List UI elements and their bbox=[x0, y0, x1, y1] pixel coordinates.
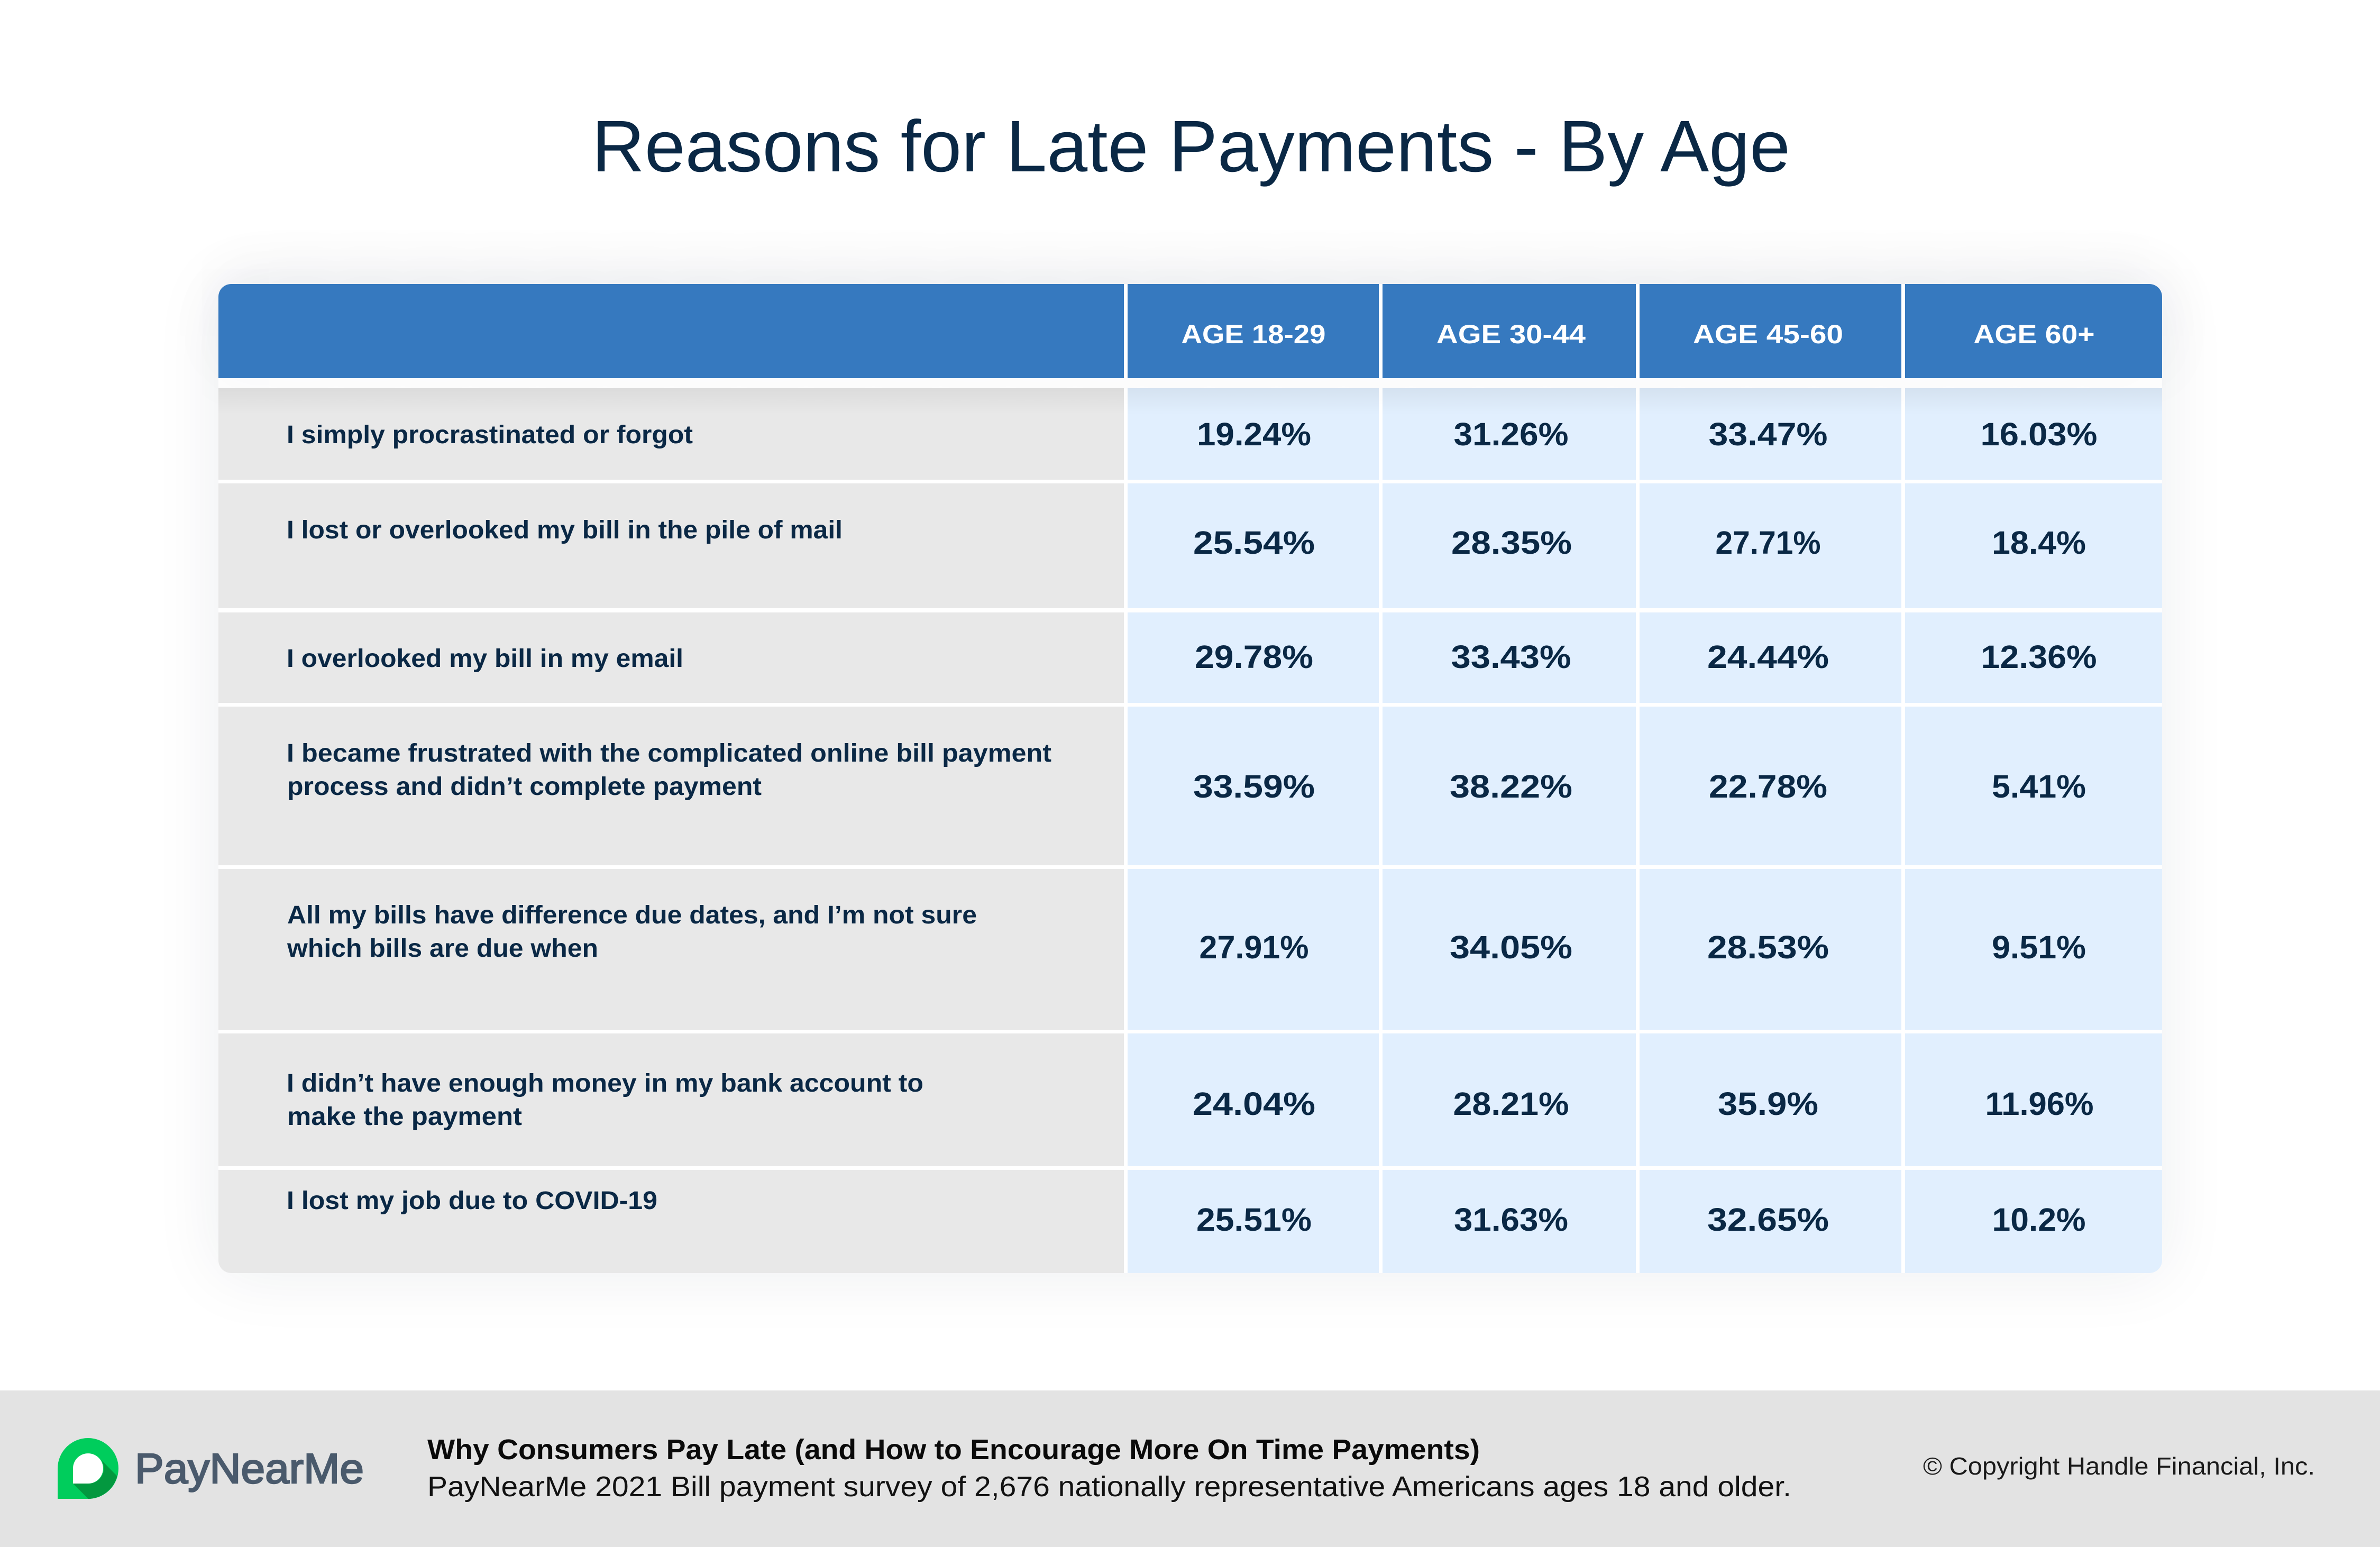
footer band bbox=[0, 1390, 2380, 1547]
source heading: Why Consumers Pay Late (and How to Encourage More On Time Payments) bbox=[427, 1434, 1480, 1466]
row label: I lost my job due to COVID-19 bbox=[287, 1187, 657, 1215]
table panel bbox=[218, 284, 2162, 1273]
row label: I lost or overlooked my bill in the pile of mail bbox=[287, 516, 843, 544]
value age 45-60: 22.78% bbox=[1709, 768, 1827, 804]
value age 45-60: 33.47% bbox=[1708, 416, 1828, 452]
row label: process and didn’t complete payment bbox=[287, 773, 762, 801]
column heading: age 18-29: AGE 18-29 bbox=[1182, 319, 1325, 349]
value age 60+: 16.03% bbox=[1980, 416, 2098, 452]
row label: make the payment bbox=[287, 1103, 522, 1131]
row: frustrated with online payment bbox=[218, 707, 2162, 865]
row label bbox=[287, 901, 977, 963]
value age 30-44: 34.05% bbox=[1450, 929, 1572, 965]
value age 18-29: 25.51% bbox=[1196, 1202, 1312, 1238]
value age 60+: 5.41% bbox=[1992, 768, 2086, 804]
value age 60+: 9.51% bbox=[1992, 929, 2086, 965]
value age 60+: 12.36% bbox=[1981, 639, 2097, 675]
value age 30-44: 33.43% bbox=[1451, 639, 1571, 675]
row: not enough money bbox=[218, 1033, 2162, 1166]
row label: I became frustrated with the complicated online bill payment bbox=[287, 739, 1051, 767]
row label: I simply procrastinated or forgot bbox=[287, 421, 693, 449]
value age 18-29: 19.24% bbox=[1197, 416, 1311, 452]
row: overlooked bill in email bbox=[218, 612, 2162, 703]
value age 18-29: 29.78% bbox=[1195, 639, 1313, 675]
value age 45-60: 27.71% bbox=[1716, 525, 1820, 561]
table header row bbox=[218, 284, 2162, 378]
row: different due dates bbox=[218, 869, 2162, 1030]
row label: I overlooked my bill in my email bbox=[287, 645, 683, 673]
value age 30-44: 38.22% bbox=[1450, 768, 1572, 804]
value age 60+: 10.2% bbox=[1992, 1202, 2086, 1238]
title: Reasons for Late Payments - By Age bbox=[592, 106, 1790, 187]
row: procrastinated or forgot bbox=[218, 388, 2162, 480]
column heading: age 45-60: AGE 45-60 bbox=[1693, 319, 1843, 349]
value age 45-60: 32.65% bbox=[1707, 1202, 1829, 1238]
icon: PayNearMe logo mark bbox=[58, 1438, 118, 1499]
value age 18-29: 25.54% bbox=[1193, 525, 1315, 561]
value age 60+: 11.96% bbox=[1985, 1086, 2093, 1122]
value age 18-29: 24.04% bbox=[1193, 1086, 1315, 1122]
value age 45-60: 28.53% bbox=[1707, 929, 1829, 965]
value age 45-60: 24.44% bbox=[1707, 639, 1829, 675]
value age 45-60: 35.9% bbox=[1718, 1086, 1818, 1122]
row label bbox=[287, 1069, 923, 1131]
column heading: age 60+: AGE 60+ bbox=[1974, 319, 2094, 349]
column heading: age 30-44: AGE 30-44 bbox=[1436, 319, 1586, 349]
row label: I didn’t have enough money in my bank account to bbox=[287, 1069, 923, 1097]
row label: which bills are due when bbox=[287, 935, 598, 963]
value age 30-44: 28.35% bbox=[1451, 525, 1572, 561]
row label bbox=[287, 739, 1051, 801]
row label: All my bills have difference due dates, and I’m not sure bbox=[287, 901, 977, 929]
value age 18-29: 27.91% bbox=[1200, 929, 1308, 965]
row: lost job due to covid bbox=[218, 1170, 2162, 1273]
row: lost bill in mail bbox=[218, 483, 2162, 608]
value age 30-44: 28.21% bbox=[1453, 1086, 1569, 1122]
value age 30-44: 31.63% bbox=[1454, 1202, 1568, 1238]
logo wordmark: PayNearMe bbox=[135, 1445, 364, 1492]
value age 30-44: 31.26% bbox=[1453, 416, 1569, 452]
value age 60+: 18.4% bbox=[1992, 525, 2086, 561]
value age 18-29: 33.59% bbox=[1193, 768, 1315, 804]
copyright: © Copyright Handle Financial, Inc. bbox=[1923, 1452, 2315, 1480]
source description: PayNearMe 2021 Bill payment survey of 2,676 nationally representative Americans ages 18 and older. bbox=[427, 1471, 1791, 1503]
